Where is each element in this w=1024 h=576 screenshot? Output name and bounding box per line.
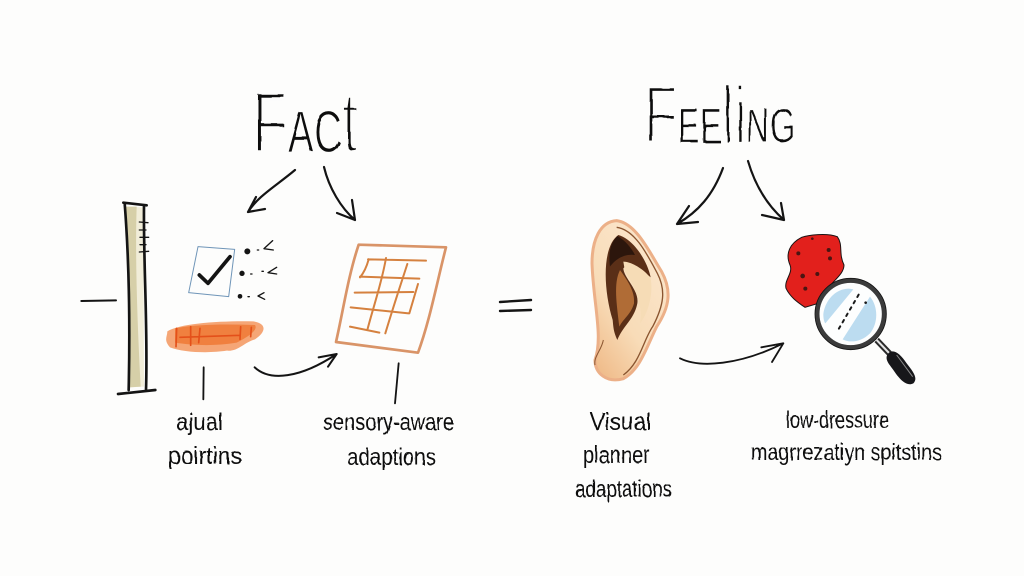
- label: ajual pointins: [168, 409, 242, 470]
- arrow: Fact to grid: [324, 167, 355, 220]
- label: sensory-aware adaptions: [323, 409, 454, 471]
- label: Visual planner adaptations: planner: [583, 442, 650, 469]
- arrow: Feeling to ear: [677, 168, 723, 224]
- icon: ear: [592, 221, 668, 380]
- arrow: Feeling to magnifier: [748, 161, 784, 220]
- panel: fact illustrations: [81, 203, 446, 403]
- icon: magnifying glass: [815, 278, 915, 384]
- connector under grid: [395, 363, 399, 403]
- arrow: ear to magnifier: [680, 343, 783, 364]
- panel: feeling illustrations: [592, 221, 915, 384]
- icon: sensory grid sheet: [336, 245, 446, 353]
- label: low-dressure magrrezatiyn spitstins: magrrezatiyn spitstins: [751, 439, 942, 465]
- icon: orange highlighted bar: [166, 321, 264, 352]
- label: ajual pointins: ajual: [176, 409, 223, 436]
- arrow: bar to grid: [255, 354, 337, 376]
- icon: red blob: [786, 235, 844, 307]
- label: low-dressure magrrezatiyn spitstins: low-dressure: [786, 407, 889, 434]
- equals sign: [500, 300, 531, 311]
- label: ajual pointins: poirtins: [168, 443, 242, 470]
- title: Fact: FACt: [252, 75, 358, 171]
- label: low-dressure magrrezatiyn spitstins: [751, 407, 942, 465]
- icon: checklist: [189, 241, 277, 299]
- label: Visual planner adaptations: Visual: [590, 408, 651, 436]
- icon: ruler: [118, 203, 155, 394]
- connector under bar: [201, 367, 206, 399]
- label: sensory-aware adaptions: sensory-aware: [323, 409, 454, 436]
- label: Visual planner adaptations: adaptations: [575, 476, 672, 503]
- arrow: Fact to checklist: [248, 170, 295, 212]
- label: Visual planner adaptations: [575, 408, 672, 503]
- dash beside ruler: [81, 297, 116, 304]
- title: Feeling: FEEliNG: [644, 70, 796, 161]
- label: sensory-aware adaptions: adaptions: [347, 444, 436, 471]
